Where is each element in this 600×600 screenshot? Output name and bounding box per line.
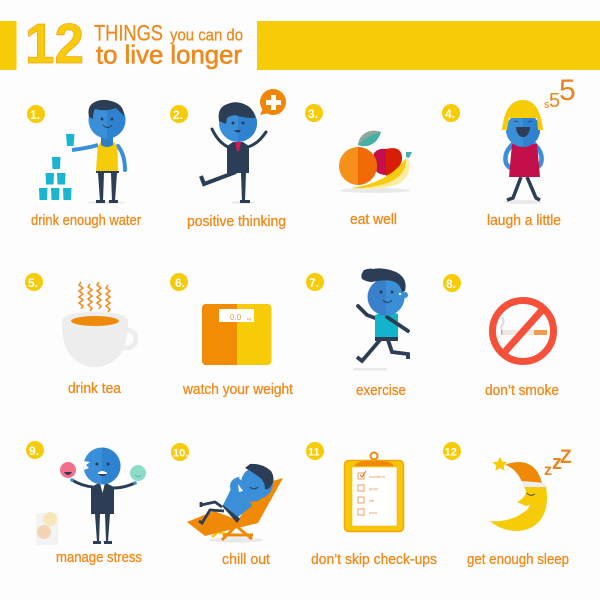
item 1: drink enough water	[27, 100, 141, 229]
header left bar	[0, 21, 16, 70]
badge 5: 5.	[28, 276, 38, 290]
item 2: positive thinking	[170, 89, 286, 230]
badge 12: 12	[444, 446, 457, 458]
businessman juggling emotions	[70, 448, 137, 544]
tea cup	[62, 312, 136, 367]
zzz: Z	[560, 447, 572, 468]
item 4: laugh a little	[442, 74, 576, 229]
badge 8: 8.	[446, 277, 456, 291]
label: eat well	[350, 212, 397, 228]
no smoking sign	[492, 300, 554, 362]
label: drink tea	[68, 381, 122, 397]
scale: 0.0	[230, 313, 242, 322]
speech bubble with plus	[260, 89, 286, 115]
label: drink enough water	[31, 213, 141, 229]
label: manage stress	[56, 550, 142, 566]
zzz	[544, 447, 572, 479]
badge 11: 11	[308, 446, 320, 458]
zzz: z	[552, 452, 562, 474]
calm face	[130, 465, 146, 481]
label: positive thinking	[187, 214, 286, 230]
badge 9: 9.	[29, 444, 39, 458]
clipboard: poor	[369, 510, 378, 515]
label: don’t skip check-ups	[311, 552, 437, 568]
title line 2: to live longer	[96, 40, 242, 70]
item 9: manage stress	[26, 441, 146, 566]
title line 1 large: THINGS	[94, 20, 163, 46]
badge 2	[170, 105, 188, 123]
clipboard: excellent	[369, 474, 386, 479]
item 3: eat well	[305, 104, 412, 228]
badge 2: 2.	[173, 108, 183, 122]
icon: stacked cups	[39, 157, 72, 200]
laughter letters: s	[544, 99, 550, 111]
scale	[202, 304, 272, 365]
item 11: check-ups	[306, 442, 437, 568]
steam	[79, 282, 110, 312]
laughter letters: 5	[549, 90, 560, 112]
header right bar	[257, 21, 600, 70]
header	[0, 12, 600, 76]
clipboard	[344, 452, 404, 532]
item 6: watch your weight	[170, 273, 293, 398]
laughing girl	[502, 100, 543, 204]
running man	[353, 268, 408, 370]
item 12: get enough sleep	[443, 442, 572, 568]
title line 1 small: you can do	[170, 26, 243, 44]
label: laugh a little	[487, 213, 561, 229]
clipboard: fair	[369, 498, 375, 503]
title number 12: 12	[25, 12, 84, 76]
happy face	[60, 462, 76, 478]
badge 6: 6.	[175, 276, 185, 290]
label: get enough sleep	[467, 552, 569, 568]
badge 4: 4.	[445, 107, 455, 121]
person drinking	[66, 100, 126, 204]
label: exercise	[356, 383, 406, 399]
badge 7: 7.	[309, 276, 319, 290]
laughter letters	[544, 74, 576, 112]
zzz: z	[544, 462, 552, 479]
badge 10: 10.	[173, 448, 188, 460]
man on deck chair	[187, 464, 283, 542]
badge 1: 1.	[30, 108, 40, 122]
laughter letters: 5	[559, 74, 576, 107]
faded discarded emotions	[36, 512, 58, 545]
item 10: chill out	[171, 443, 283, 568]
badge 3: 3.	[308, 107, 318, 121]
clipboard: good	[369, 486, 378, 491]
item 7: exercise	[306, 268, 408, 399]
person in suit	[201, 102, 266, 204]
item 8: don't smoke	[443, 274, 559, 399]
badge 4	[442, 104, 460, 122]
label: don’t smoke	[485, 383, 559, 399]
sleeping moon	[490, 457, 547, 531]
label: watch your weight	[182, 382, 293, 398]
item 5: drink tea	[25, 273, 136, 397]
scale: kg	[247, 316, 251, 321]
label: chill out	[222, 552, 270, 568]
fruit illustration	[339, 131, 412, 193]
